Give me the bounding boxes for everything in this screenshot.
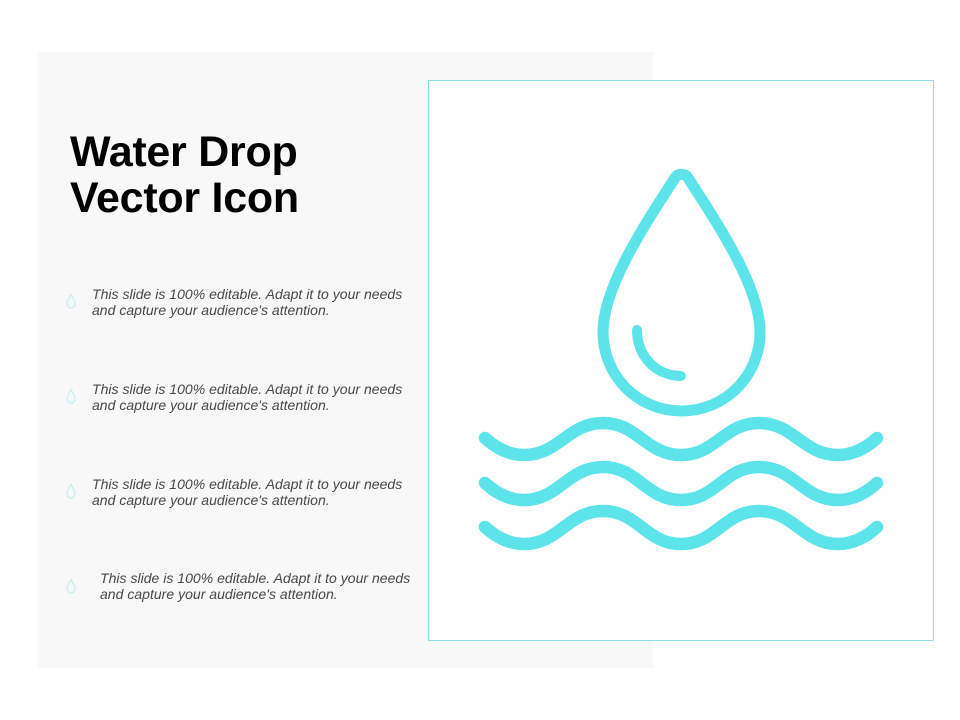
text block 2: This slide is 100% editable. Adapt it to your needs <box>92 381 402 397</box>
text block 3: and capture your audience's attention. <box>92 492 330 508</box>
panel: white icon frame <box>428 80 934 641</box>
text block 4: This slide is 100% editable. Adapt it to your needs <box>100 570 410 586</box>
wave 3 <box>485 511 877 544</box>
text block 3 <box>92 476 402 508</box>
text block 1 <box>92 286 402 318</box>
text block 4: and capture your audience's attention. <box>100 586 338 602</box>
text block 2: and capture your audience's attention. <box>92 397 330 413</box>
text block 4 <box>100 570 410 602</box>
text block 3: This slide is 100% editable. Adapt it to your needs <box>92 476 402 492</box>
icon: bullet drop 1 <box>66 294 76 309</box>
icon: bullet drop 3 <box>66 484 76 499</box>
drop outline <box>603 174 760 411</box>
text block 1: This slide is 100% editable. Adapt it to your needs <box>92 286 402 302</box>
icon: bullet drop 2 <box>66 388 76 404</box>
panel: grey background <box>37 52 653 668</box>
icon: bullet drop 4 <box>66 578 76 594</box>
title: Water Drop <box>70 128 297 176</box>
wave 1 <box>485 423 877 455</box>
drop highlight <box>637 330 681 376</box>
wave 2 <box>485 467 877 500</box>
title <box>70 128 299 222</box>
title: Vector Icon <box>70 174 299 222</box>
text block 1: and capture your audience's attention. <box>92 302 330 318</box>
icon: water drop over waves <box>478 168 884 550</box>
text block 2 <box>92 381 402 413</box>
